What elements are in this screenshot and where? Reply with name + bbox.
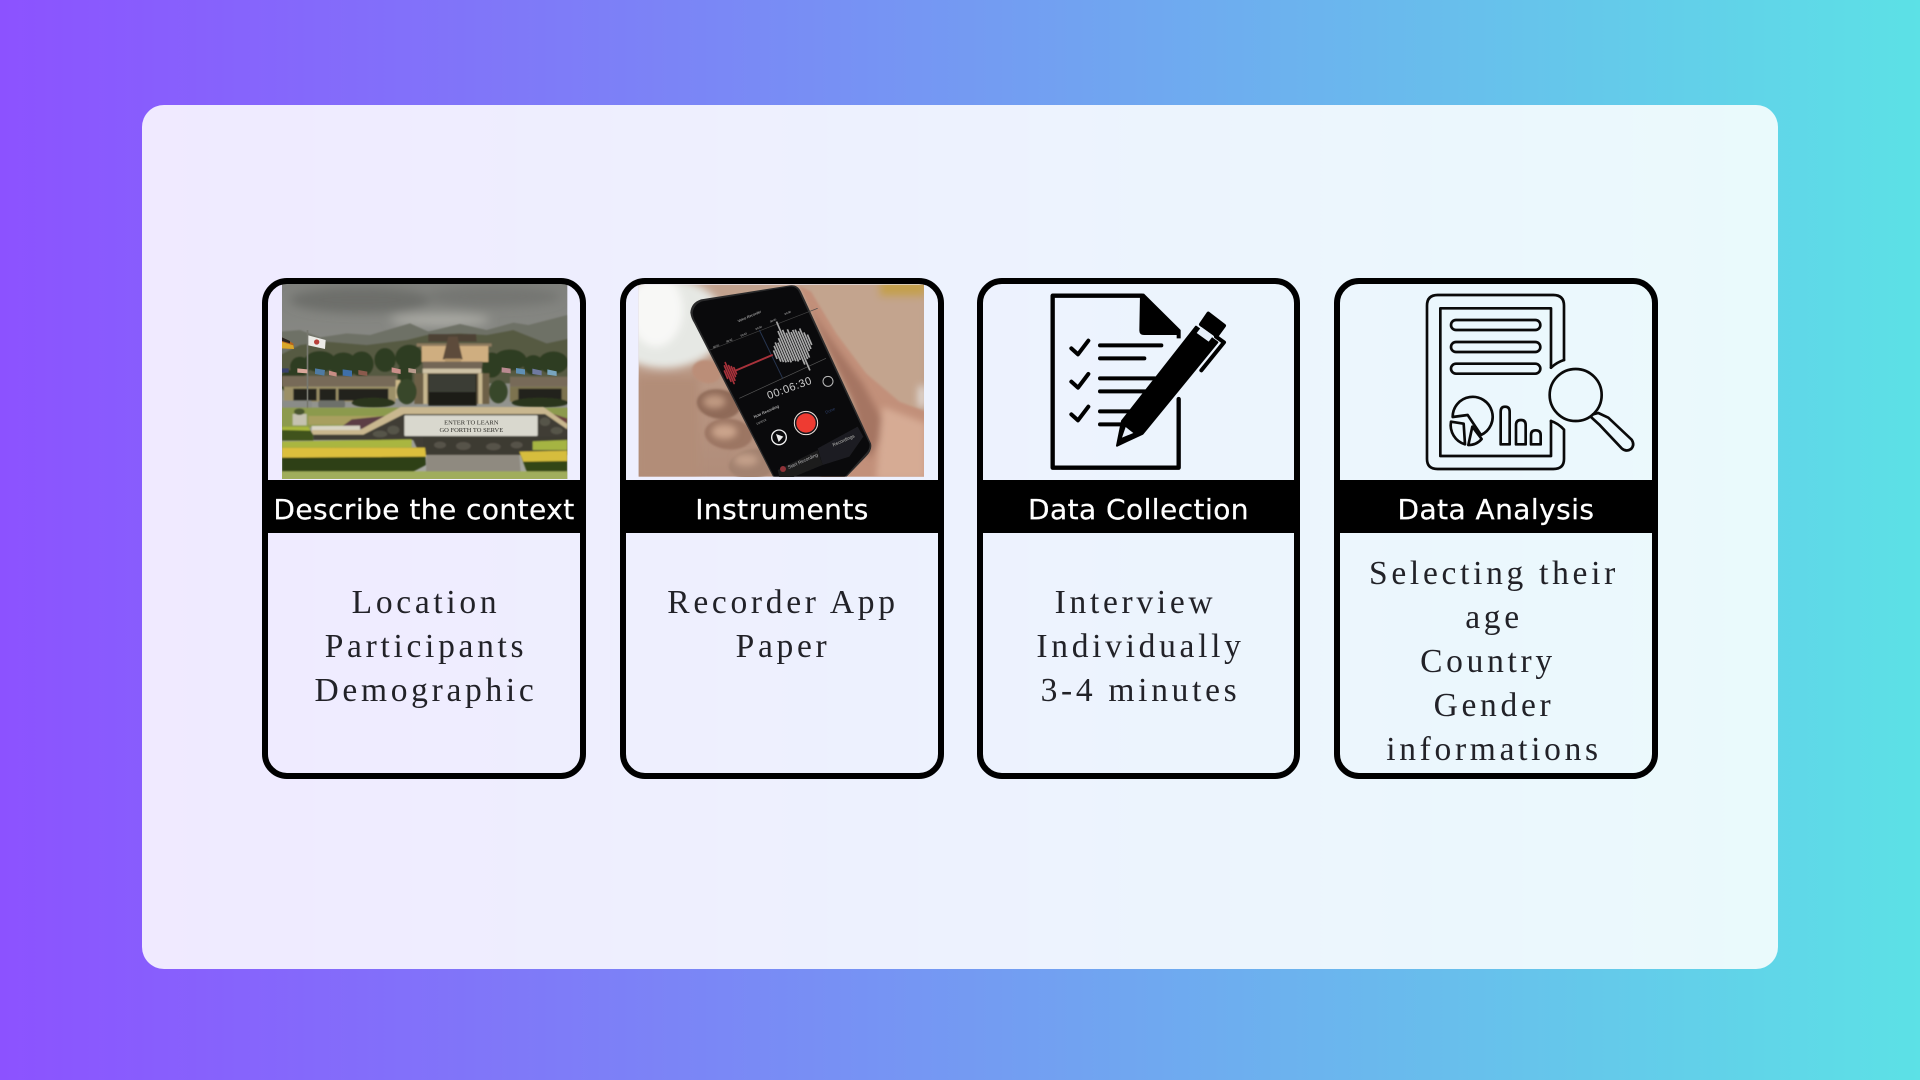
body text: Recorder App [667,584,899,621]
body text [1369,555,1619,768]
icon: report with magnifier [1426,294,1635,470]
panel: main translucent panel [142,105,1778,969]
screen details: Now Recording [753,404,780,419]
screen details: 00:06:30 [766,375,814,402]
flags [282,330,557,408]
photo: hand holding phone with recorder app [638,284,924,477]
card outline [620,278,944,779]
screen details: 00:03 [740,331,748,338]
body text: Participants [325,628,527,665]
screen details: 00:05 [769,317,777,324]
hedges [282,427,313,441]
screen details: Done [824,406,836,415]
grey waveform [772,321,812,371]
body text: age [1465,599,1523,636]
bottom lawn [282,470,568,479]
heading band: Instruments [695,493,869,526]
card: data collection [977,278,1300,779]
phone body [690,285,871,477]
heading band [977,480,1300,533]
gravel [426,455,521,472]
screen details: Recordings [832,433,856,448]
photo: campus building [282,284,568,479]
body text [667,584,899,665]
heading band: Describe the context [273,493,575,526]
body text: Selecting their [1369,555,1619,592]
body text: Country [1420,643,1556,680]
sign text: ENTER TO LEARN [444,419,499,426]
heading band [262,480,586,533]
card: instruments [620,278,1658,779]
stone wall [312,414,568,448]
body text: informations [1386,731,1602,768]
screen details: 00:06 [784,309,792,316]
card outline [262,278,586,779]
heading band: Data Analysis [1398,493,1594,526]
screen details: Start Recording [787,452,819,470]
heading band: Data Collection [1028,493,1249,526]
red waveform [724,354,773,384]
screen details: Voice Recorder [737,309,762,323]
card outline [977,278,1300,779]
lawn [280,408,570,428]
body text: 3-4 minutes [1041,672,1240,709]
body text: Interview [1055,584,1216,621]
body text: Paper [736,628,830,665]
body text [1036,584,1245,709]
icon: checklist and pen [1050,294,1226,470]
garden bed [339,416,385,429]
body text: Individually [1036,628,1245,665]
heading band [1334,480,1658,533]
heading band [620,480,944,533]
screen details: 00:04 [755,324,763,331]
screen details: 00:02 [725,337,734,344]
body text: Location [352,584,500,621]
body text: Demographic [314,672,538,709]
screen details [710,308,863,477]
card: describe the context [262,278,586,779]
screen details: 00:01 [712,343,720,349]
hand [799,286,926,480]
photo: campus building: GO FORTH TO SERVE [439,427,503,434]
body text: Gender [1434,687,1554,724]
card outline [1334,278,1658,779]
card: data analysis [1334,278,1658,779]
body text [314,584,538,709]
screen details: 10/2018 [755,418,767,426]
